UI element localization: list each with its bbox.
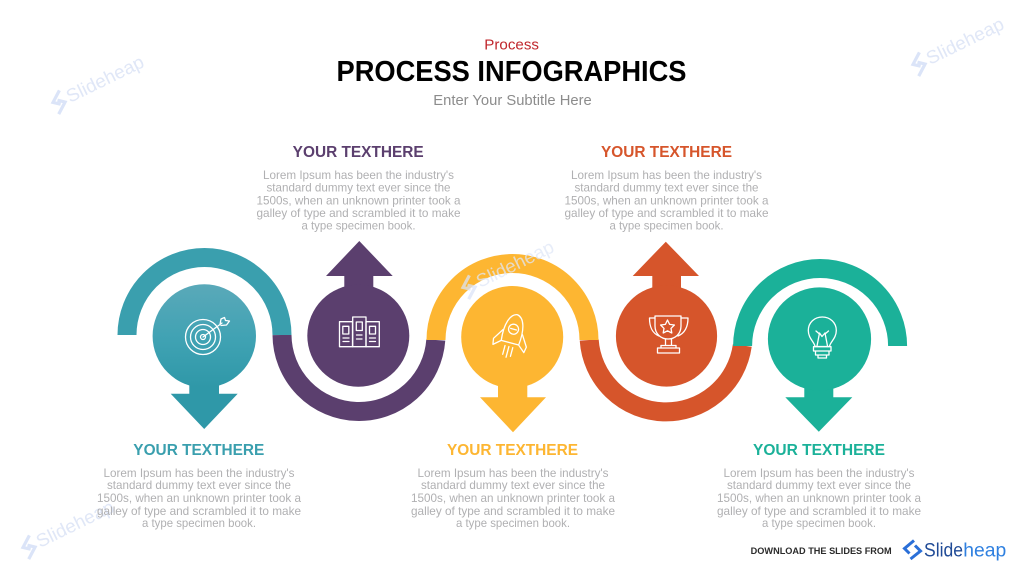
ribbon segment: orange (589, 340, 742, 412)
body: teal: a type specimen book. (142, 516, 256, 530)
body: yellow: a type specimen book. (456, 516, 570, 530)
marker: orange pin with up arrow (616, 242, 717, 387)
body: green: a type specimen book. (762, 516, 876, 530)
body: purple: Lorem Ipsum has been the industry's (263, 168, 454, 182)
watermark: center over ribbon: Slideheap (473, 236, 557, 292)
heading: teal: YOUR TEXTHERE (133, 442, 264, 459)
watermark: bottom left: Slideheap (33, 496, 117, 552)
marker: teal pin with down arrow (153, 284, 256, 429)
body: green: standard dummy text ever since the (727, 478, 911, 492)
heading: purple: YOUR TEXTHERE (293, 144, 424, 161)
ribbon segment: green (743, 268, 898, 346)
subtitle: Enter Your Subtitle Here (433, 92, 592, 109)
icon: trophy (650, 316, 688, 353)
body: purple: a type specimen book. (302, 218, 416, 232)
marker: purple pin with up arrow (307, 241, 409, 387)
body: orange: galley of type and scrambled it to make (564, 206, 769, 220)
ribbon segment: purple (282, 335, 436, 411)
body: purple (256, 168, 461, 232)
body: green (717, 466, 921, 530)
title: PROCESS INFOGRAPHICS (336, 56, 686, 88)
watermark: top left: Slideheap (63, 51, 147, 107)
body: purple: 1500s, when an unknown printer took a (256, 194, 461, 208)
body: teal: Lorem Ipsum has been the industry's (104, 466, 294, 480)
text block: orange (564, 144, 769, 232)
body: orange: 1500s, when an unknown printer took a (564, 194, 769, 208)
text block: teal (97, 442, 301, 530)
ribbon segment: teal (127, 258, 282, 335)
footer text: DOWNLOAD THE SLIDES FROM (751, 546, 892, 556)
body: teal (97, 466, 301, 530)
body: purple: standard dummy text ever since the (266, 180, 451, 194)
body: orange: a type specimen book. (610, 218, 724, 232)
heading: yellow: YOUR TEXTHERE (447, 442, 578, 459)
body: orange: Lorem Ipsum has been the industry's (571, 168, 762, 182)
icon: light bulb (808, 317, 836, 358)
footer: download note and logo (751, 540, 1006, 562)
body: yellow (411, 466, 615, 530)
body: teal: standard dummy text ever since the (107, 478, 291, 492)
wave ribbon (127, 258, 898, 412)
body: teal: 1500s, when an unknown printer took a (97, 491, 301, 505)
icon: target (186, 318, 230, 354)
body: yellow: galley of type and scrambled it to make (411, 504, 615, 518)
body: yellow: 1500s, when an unknown printer took a (411, 491, 615, 505)
marker: yellow pin with down arrow (461, 286, 563, 432)
marker: green pin with down arrow (768, 287, 871, 432)
heading: orange: YOUR TEXTHERE (601, 144, 732, 161)
section label: Process (484, 37, 539, 53)
logo wordmark: Slide (924, 541, 963, 562)
ribbon segment: yellow (436, 264, 589, 340)
text block: green (717, 442, 921, 530)
logo icon (904, 540, 920, 559)
body: green: galley of type and scrambled it to make (717, 504, 921, 518)
heading: green: YOUR TEXTHERE (753, 442, 885, 459)
icon: buildings (340, 317, 379, 347)
body: yellow: standard dummy text ever since the (421, 478, 605, 492)
body: green: 1500s, when an unknown printer took a (717, 491, 921, 505)
body: purple: galley of type and scrambled it to make (256, 206, 461, 220)
body: teal: galley of type and scrambled it to make (97, 504, 301, 518)
body: yellow: Lorem Ipsum has been the industry's (418, 466, 608, 480)
icon: rocket (490, 310, 534, 362)
body: orange: standard dummy text ever since the (574, 180, 759, 194)
text block: purple (256, 144, 461, 232)
text block: yellow (411, 442, 615, 530)
body: green: Lorem Ipsum has been the industry's (724, 466, 914, 480)
footer: download note and logo: heap (963, 541, 1006, 562)
body: orange (564, 168, 769, 232)
watermark: top right: Slideheap (923, 13, 1007, 69)
